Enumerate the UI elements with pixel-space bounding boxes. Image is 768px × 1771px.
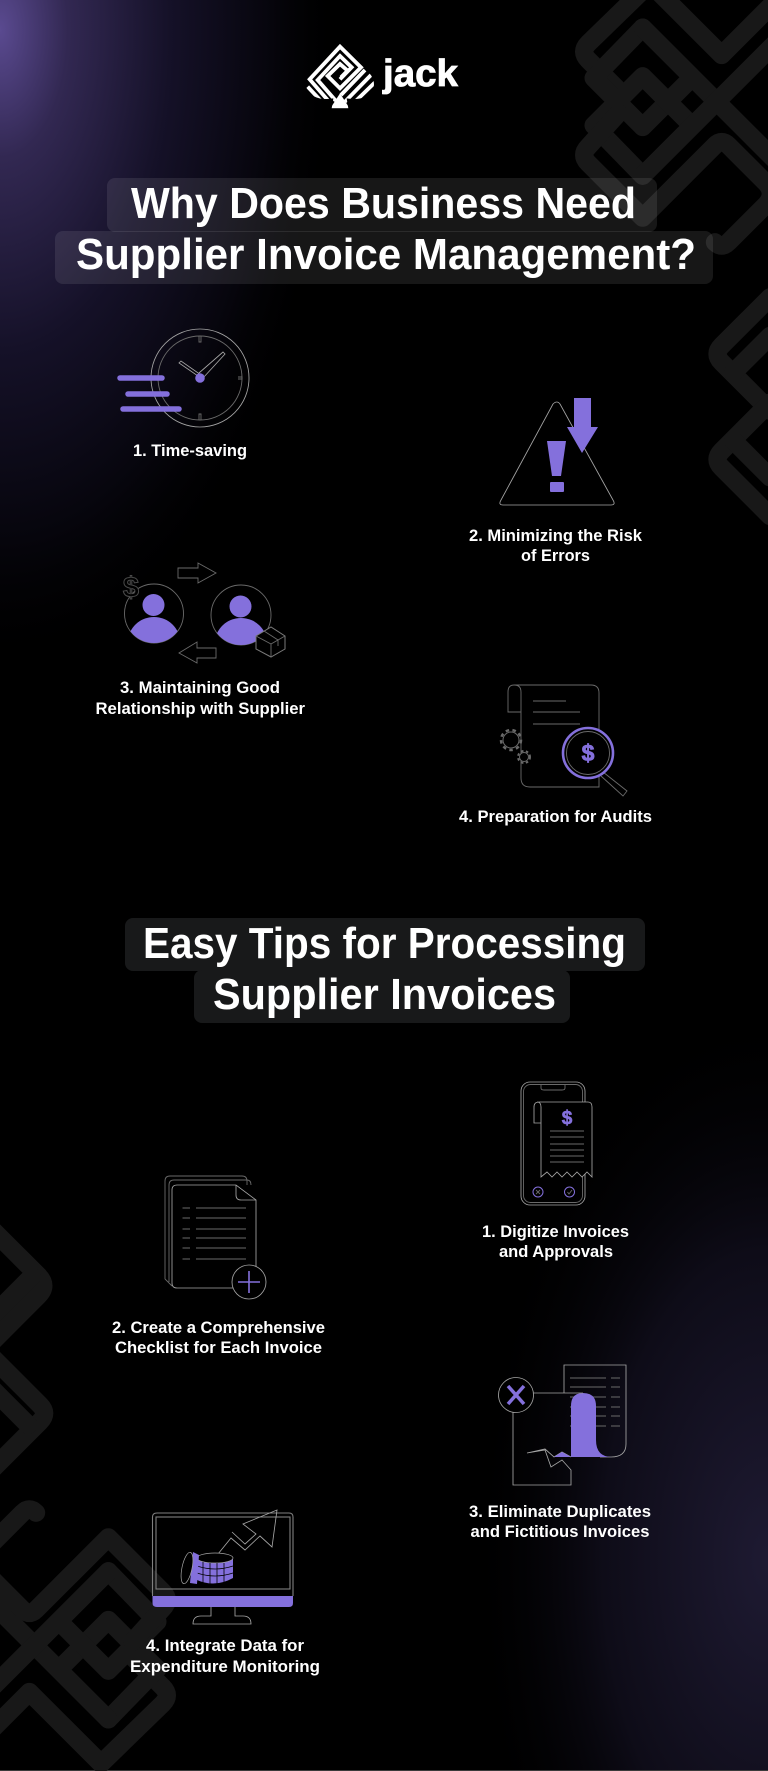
tip 3: eliminate duplicates — [469, 1365, 651, 1541]
tip 1: digitize invoices: and Approvals — [499, 1242, 613, 1261]
item: relationship with supplier: Relationship with Supplier — [96, 699, 305, 718]
title: easy tips: Easy Tips for Processing — [143, 919, 626, 968]
label: 4. Integrate Data for — [146, 1636, 304, 1655]
icon: document with magnifier — [501, 685, 627, 796]
icon: torn invoice with X — [498, 1365, 626, 1485]
item: relationship with supplier — [96, 563, 305, 718]
label: 2. Create a Comprehensive — [112, 1318, 325, 1337]
icon: monitor with coins and rising arrow — [152, 1510, 293, 1624]
title: why does business need: Why Does Business Need — [131, 179, 636, 228]
icon: two people exchange — [123, 563, 285, 668]
icon: clock — [120, 329, 249, 427]
title: easy tips — [125, 918, 645, 1023]
title: easy tips: Supplier Invoices — [213, 970, 556, 1019]
icon: phone with receipt: $ — [562, 1108, 573, 1129]
icon: phone with receipt — [521, 1082, 592, 1205]
title: why does business need — [55, 178, 713, 284]
item: minimizing risk — [469, 398, 643, 565]
label: 1. Time-saving — [133, 441, 247, 460]
background pattern bottom left — [0, 1227, 167, 1770]
icon: two people exchange: $ — [123, 572, 139, 604]
title: why does business need: Supplier Invoice Management? — [76, 230, 696, 279]
icon: warning triangle with arrow — [500, 398, 614, 505]
tip 1: digitize invoices — [482, 1082, 629, 1261]
label: 3. Maintaining Good — [120, 678, 280, 697]
label: 4. Preparation for Audits — [459, 807, 652, 826]
tip 2: checklist — [112, 1176, 325, 1357]
icon: documents with plus — [165, 1176, 266, 1299]
logo — [304, 47, 459, 110]
icon: document with magnifier: $ — [582, 740, 595, 766]
logo wordmark: jack — [382, 53, 459, 95]
background pattern top right — [584, 0, 768, 516]
icon: spade maze — [304, 47, 380, 110]
label: 3. Eliminate Duplicates — [469, 1502, 651, 1521]
tip 2: checklist: Checklist for Each Invoice — [115, 1338, 322, 1357]
tip 4: integrate data: Expenditure Monitoring — [130, 1657, 320, 1676]
tip 4: integrate data — [130, 1510, 320, 1676]
tip 3: eliminate duplicates: and Fictitious Invoices — [470, 1522, 650, 1541]
item: time-saving — [120, 329, 249, 460]
item: minimizing risk: of Errors — [521, 546, 590, 565]
label: 1. Digitize Invoices — [482, 1222, 629, 1241]
item: preparation for audits — [459, 685, 652, 826]
label: 2. Minimizing the Risk — [469, 526, 643, 545]
